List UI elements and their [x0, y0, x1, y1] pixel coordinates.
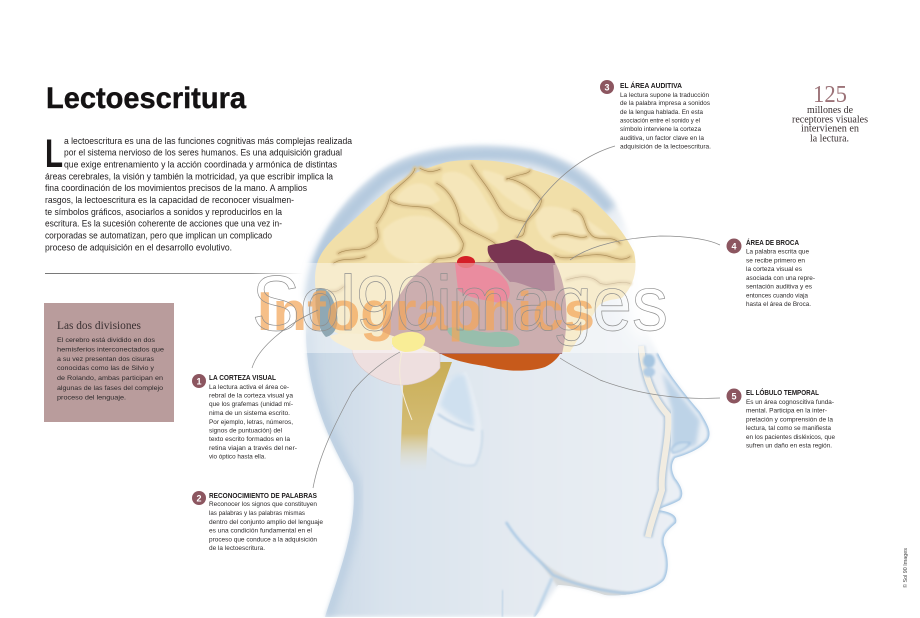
callout 3: el área auditiva: asociación entre el sonido y el — [620, 118, 700, 124]
callout 2: reconocimiento de palabras: RECONOCIMIENTO DE PALABRAS — [209, 491, 317, 500]
callout 2: reconocimiento de palabras: Reconocer los signos que constituyen — [209, 501, 317, 508]
panel: las dos divisiones — [44, 303, 174, 422]
brain: cerebellum — [352, 345, 440, 385]
callout 1: la corteza visual: nima de un sistema escrito. — [209, 410, 290, 417]
intro text block: fina coordinación de los movimientos precisos de la mano. A amplios — [45, 183, 307, 193]
brain: blue-gray visual cortex — [315, 288, 337, 337]
intro text block: te símbolos gráficos, asociarlos a sonidos y reproducirlos en la — [45, 207, 282, 217]
callout 4: área de broca: La palabra escrita que — [746, 248, 809, 256]
callout 4: área de broca: sentación auditiva y es — [746, 284, 813, 290]
callout 3: el área auditiva: símbolo interviene la corteza — [620, 126, 701, 133]
callout 2: reconocimiento de palabras: las palabras y las palabras mismas — [209, 510, 306, 517]
callout 1: la corteza visual: texto escrito formados en la — [209, 436, 290, 443]
callout 4: área de broca: hasta el área de Broca. — [746, 301, 811, 308]
illustration: brain — [315, 160, 636, 385]
illustration: human head in profile — [306, 146, 710, 617]
callout 5: el lóbulo temporal — [726, 388, 835, 450]
brain: lower occipital — [330, 333, 392, 350]
icon: spinal nerve column — [400, 362, 452, 472]
intro text block: por el sistema nervioso de los seres humanos. Es una adquisición gradual — [64, 148, 342, 158]
callout 3: el área auditiva: 3 — [604, 82, 610, 92]
callout 3: el área auditiva: EL ÁREA AUDITIVA — [620, 81, 682, 90]
brain: red spot — [457, 256, 475, 268]
callout 5: el lóbulo temporal: EL LÓBULO TEMPORAL — [746, 388, 820, 397]
panel: las dos divisiones: proceso del lenguaje. — [57, 394, 126, 402]
intro text block: corporadas se automatizan, pero que implican un complicado — [45, 230, 272, 240]
icon: nasal bone strip — [641, 346, 668, 537]
callout 5: el lóbulo temporal: mental. Participa en la inter- — [746, 408, 827, 414]
intro text block: que exige entrenamiento y la acción coordinada y armónica de distintas — [64, 160, 337, 170]
callout 3: el área auditiva: auditiva, un factor clave en la — [620, 135, 704, 142]
callout 2: reconocimiento de palabras: proceso que conduce a la adquisición — [209, 536, 317, 544]
icon: jaw line — [506, 522, 650, 594]
intro text block: rasgos, la lectoescritura es la capacidad de reconocer visualmen- — [45, 195, 294, 205]
callout 3: el área auditiva: adquisición de la lectoescritura. — [620, 144, 711, 150]
callout 1: la corteza visual: signos de puntuación) del — [209, 428, 283, 434]
callout 5: el lóbulo temporal: sufren un daño en esta región. — [746, 442, 832, 450]
callout 2: reconocimiento de palabras: es una condición fundamental en el — [209, 528, 313, 534]
brain: temporal lobe — [438, 340, 563, 371]
stat: 125 millones: la lectura. — [810, 133, 849, 144]
watermark band — [0, 259, 920, 353]
callout 5: el lóbulo temporal: en los pacientes disléxicos, que — [746, 434, 835, 441]
brain: maroon Broca area — [488, 240, 555, 265]
callout 4: área de broca: asociada con una repre- — [746, 275, 815, 282]
stat: 125 millones — [792, 82, 868, 144]
callout 1: la corteza visual: retina viajan a través del ner- — [209, 445, 297, 452]
leader 5 — [560, 358, 720, 398]
icon: under-jaw shading — [544, 563, 634, 596]
callout 1: la corteza visual: que los grafemas (unidad mí- — [209, 401, 293, 408]
callout 3: el área auditiva: La lectura supone la traducción — [620, 92, 709, 99]
watermark orange text: Infographics — [257, 280, 595, 342]
panel: las dos divisiones: algunas de las fases del complejo — [57, 385, 163, 392]
panel heading: Las dos divisiones — [57, 320, 142, 332]
panel: las dos divisiones: de Rolando, ambas participan en — [57, 375, 163, 382]
leader 4 — [570, 236, 720, 260]
brain: green area — [447, 327, 519, 347]
callout 2: reconocimiento de palabras: de la lectoescritura. — [209, 545, 265, 552]
drop cap: L — [45, 132, 63, 176]
callout 4: área de broca: 4 — [731, 242, 737, 252]
callout 5: el lóbulo temporal: Es un área cognoscitiva funda- — [746, 399, 834, 406]
callout 4: área de broca: entonces cuando viaja — [746, 292, 808, 300]
callout 3: el área auditiva: de la palabra impresa a sonidos — [620, 100, 711, 107]
leader 2 — [313, 352, 400, 488]
panel: las dos divisiones: conocidas como las de Silvio y — [57, 365, 155, 372]
leader 3 — [517, 146, 615, 238]
intro text block: proceso de adquisición en el desarrollo evolutivo. — [45, 242, 232, 252]
icon: nostril — [671, 442, 690, 453]
title: Lectoescritura — [46, 82, 246, 115]
callout 4: área de broca: se recibe primero en — [746, 258, 805, 264]
intro text block: escritura. Es la sucesión coherente de acciones que una vez in- — [45, 218, 282, 228]
brain: pink auditory area — [455, 263, 510, 304]
callout 1: la corteza visual: LA CORTEZA VISUAL — [209, 373, 277, 382]
icon: ear — [428, 372, 482, 466]
watermark outline text: Sol90images — [252, 259, 668, 347]
callout 1: la corteza visual: 1 — [196, 376, 202, 386]
callout 5: el lóbulo temporal: pretación y comprensión de la — [746, 416, 833, 424]
callout 4: área de broca: la corteza visual es — [746, 266, 803, 273]
intro text block — [45, 132, 352, 252]
brain: cortex — [315, 160, 636, 352]
callout 2: reconocimiento de palabras — [192, 491, 323, 552]
callout 3: el área auditiva: de la lengua hablada. En esta — [620, 109, 703, 116]
callout 3: el área auditiva — [600, 80, 711, 150]
callout 1: la corteza visual: La lectura activa el área ce- — [209, 384, 289, 391]
intro text block: a lectoescritura es una de las funciones cognitivas más complejas realizada — [64, 136, 352, 146]
callout 5: el lóbulo temporal: lectura, tal como se manifiesta — [746, 425, 831, 432]
icon: nose shading — [662, 372, 700, 452]
callout 1: la corteza visual: vio óptico hasta ella. — [209, 454, 266, 460]
brain: inner mauve lobes — [380, 262, 566, 354]
stat: 125 millones: receptores visuales — [792, 114, 868, 125]
brain: yellow area — [392, 332, 425, 352]
panel: las dos divisiones: hemisferios interconectados que — [57, 346, 164, 354]
stat: 125 millones: intervienen en — [801, 123, 859, 134]
leader lines — [252, 146, 720, 488]
stat: 125 millones: 125 — [813, 82, 847, 108]
callout 2: reconocimiento de palabras: 2 — [196, 494, 202, 504]
panel: las dos divisiones: a su vez presentan dos cisuras — [57, 356, 155, 363]
leader 1 — [252, 310, 318, 368]
callout 5: el lóbulo temporal: 5 — [731, 392, 737, 402]
callout 1: la corteza visual: Por ejemplo, letras, números, — [209, 419, 293, 426]
callout 1: la corteza visual — [192, 373, 297, 460]
brain: gyri and sulci — [320, 165, 630, 297]
callout 2: reconocimiento de palabras: dentro del conjunto amplio del lenguaje — [209, 519, 323, 526]
callout 1: la corteza visual: rebral de la corteza visual ya — [209, 392, 293, 400]
callout 4: área de broca — [726, 238, 815, 308]
panel: las dos divisiones: El cerebro está dividido en dos — [57, 337, 156, 344]
stat: 125 millones: millones de — [807, 105, 854, 116]
credit: © Sol 90 Images — [902, 547, 909, 588]
icon: cranium rim around the brain — [311, 154, 610, 300]
intro text block: áreas cerebrales, la visión y también la motricidad, ya que escribir implica la — [45, 172, 333, 182]
callout 4: área de broca: ÁREA DE BROCA — [746, 238, 799, 247]
